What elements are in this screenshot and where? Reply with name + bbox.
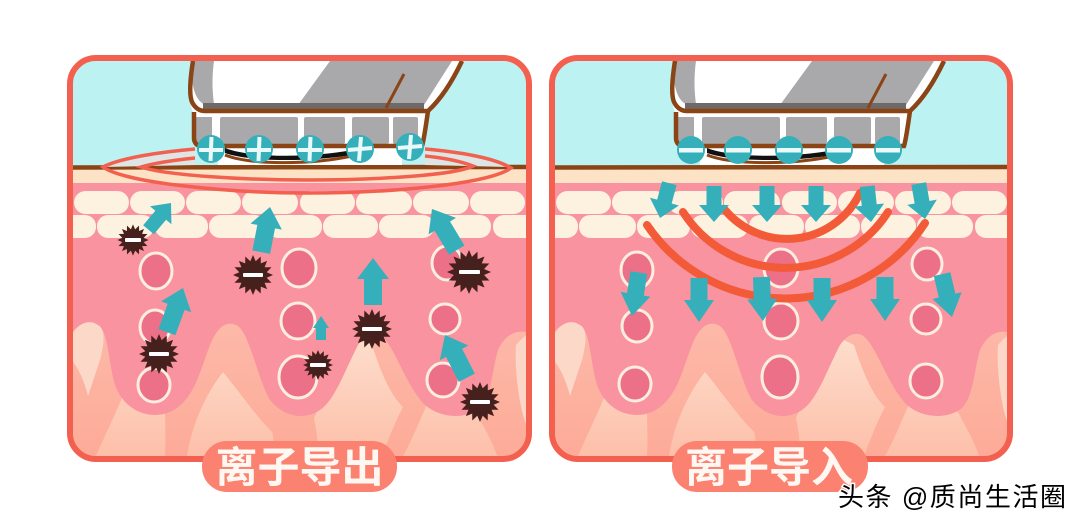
panel border [70, 58, 529, 459]
rising arrows [138, 194, 481, 385]
radiating ellipse waves [103, 149, 511, 193]
skin cross-section background [542, 55, 1020, 466]
watermark: 头条 @质尚生活圈 [838, 482, 1066, 512]
positive electrodes [197, 133, 424, 163]
skin cell circles [138, 246, 462, 402]
panel: ion import (right) [542, 55, 1020, 492]
skin cross-section background [60, 55, 538, 466]
penetrating wave arcs [647, 193, 925, 298]
panel border [552, 58, 1010, 459]
negative ions [117, 224, 500, 422]
negative electrodes [677, 136, 902, 164]
device head [672, 61, 944, 165]
label: ion import: 离子导入 [685, 444, 853, 491]
descending arrows [617, 179, 967, 322]
device head [190, 61, 462, 165]
panel: ion export (left) [60, 55, 538, 492]
label: ion export: 离子导出 [215, 444, 384, 491]
skin cell circles [619, 248, 942, 401]
